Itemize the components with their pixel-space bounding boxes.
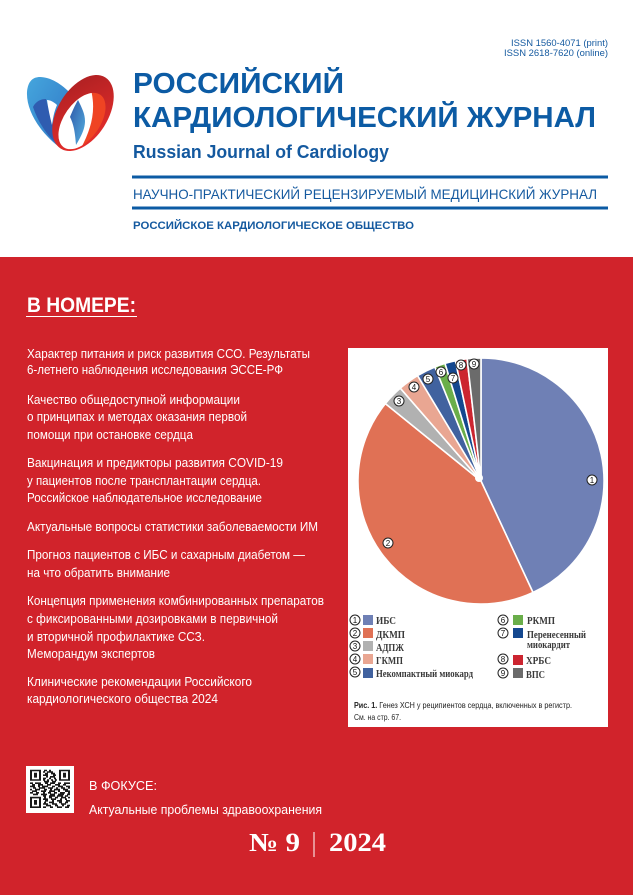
panel: figure with pie chart [348, 348, 608, 727]
title: journal name: КАРДИОЛОГИЧЕСКИЙ ЖУРНАЛ [133, 100, 596, 134]
pie slice number markers: 5 [426, 375, 431, 384]
icon: QR code [26, 766, 74, 813]
pie chart [358, 358, 604, 604]
legend right column: РКМП [527, 616, 555, 627]
issue number and year [249, 828, 386, 857]
pie slice number markers: 8 [459, 361, 464, 370]
pie slice number markers [383, 359, 597, 548]
figure caption: Рис. 1. Генез ХСН у реципиентов сердца, включенных в регистр. [354, 700, 572, 710]
pie slice number markers: 4 [412, 383, 417, 392]
legend right column: 9 [501, 669, 506, 678]
legend left column: ДКМП [376, 630, 405, 641]
figure caption: См. на стр. 67. [354, 712, 401, 722]
text block: issue contents: о принципах и методах оказания первой [27, 410, 247, 424]
text block: issue contents: Вакцинация и предикторы развития COVID-19 [27, 456, 283, 470]
text block: issue contents: Концепция применения комбинированных препаратов [27, 594, 324, 608]
ISSN numbers: ISSN 1560-4071 (print) [511, 38, 608, 48]
text block: issue contents: Меморандум экспертов [27, 647, 155, 661]
text block: issue contents: Качество общедоступной информации [27, 393, 240, 407]
pie slice number markers: 6 [439, 368, 444, 377]
text block: issue contents: Характер питания и риск развития ССО. Результаты [27, 347, 310, 361]
legend right column: ХРБС [526, 656, 551, 667]
title: journal name [133, 66, 596, 134]
legend right column [498, 615, 586, 681]
legend right column: 8 [501, 655, 506, 664]
legend left column [350, 615, 474, 680]
icon: journal heart logo [26, 75, 114, 151]
text: in focus [89, 778, 322, 817]
text block: issue contents: кардиологического общества 2024 [27, 692, 218, 706]
legend right column: ВПС [526, 670, 545, 681]
text block: issue contents: и вторичной профилактике ССЗ. [27, 630, 205, 644]
legend left column: 3 [353, 642, 358, 651]
text block: issue contents: 6-летнего наблюдения исследования ЭССЕ-РФ [27, 363, 283, 377]
title: journal name: РОССИЙСКИЙ [133, 66, 344, 100]
legend left column: 4 [353, 655, 358, 664]
text block: issue contents: с фиксированными дозировками в первичной [27, 612, 278, 626]
legend right column: Перенесенный [527, 630, 586, 641]
legend right column: 6 [501, 616, 506, 625]
ISSN numbers: ISSN 2618-7620 (online) [504, 48, 608, 58]
legend left column: 5 [353, 668, 358, 677]
pie slice number markers: 1 [590, 476, 595, 485]
legend left column: 2 [353, 629, 358, 638]
text: journal type: НАУЧНО-ПРАКТИЧЕСКИЙ РЕЦЕНЗИРУЕМЫЙ МЕДИЦИНСКИЙ ЖУРНАЛ [133, 185, 597, 202]
heading: in this issue: В НОМЕРЕ: [27, 294, 136, 317]
issue number and year: 2024 [329, 828, 386, 857]
text block: issue contents: Клинические рекомендации Российского [27, 675, 252, 689]
text block: issue contents: Российское наблюдательное исследование [27, 491, 262, 505]
legend left column: Некомпактный миокард [376, 669, 474, 680]
legend left column: ИБС [376, 616, 396, 627]
background: red section [0, 257, 633, 895]
text block: issue contents: Актуальные вопросы статистики заболеваемости ИМ [27, 520, 318, 534]
legend right column: миокардит [527, 640, 571, 651]
legend left column: АДПЖ [376, 643, 405, 654]
figure caption [354, 700, 572, 722]
text block: issue contents: помощи при остановке сердца [27, 428, 193, 442]
pie slice number markers: 9 [472, 360, 477, 369]
text: society name: РОССИЙСКОЕ КАРДИОЛОГИЧЕСКОЕ ОБЩЕСТВО [133, 219, 414, 232]
legend right column: 7 [501, 629, 506, 638]
pie slice number markers: 2 [386, 539, 391, 548]
text block: issue contents: на что обратить внимание [27, 566, 170, 580]
text: in focus: В ФОКУСЕ: [89, 778, 157, 793]
text block: issue contents: Прогноз пациентов с ИБС и сахарным диабетом — [27, 548, 305, 562]
legend left column: 1 [353, 616, 358, 625]
background: white header [0, 0, 633, 257]
text block: issue contents: у пациентов после трансплантации сердца. [27, 474, 261, 488]
ISSN numbers [504, 38, 608, 58]
issue number and year: № 9 [249, 828, 300, 857]
text: in focus: Актуальные проблемы здравоохранения [89, 803, 322, 817]
subtitle: English journal name: Russian Journal of Cardiology [133, 141, 390, 162]
text block: issue contents [27, 347, 324, 706]
pie slice number markers: 3 [397, 397, 402, 406]
pie slice number markers: 7 [451, 374, 456, 383]
legend left column: ГКМП [376, 656, 403, 667]
